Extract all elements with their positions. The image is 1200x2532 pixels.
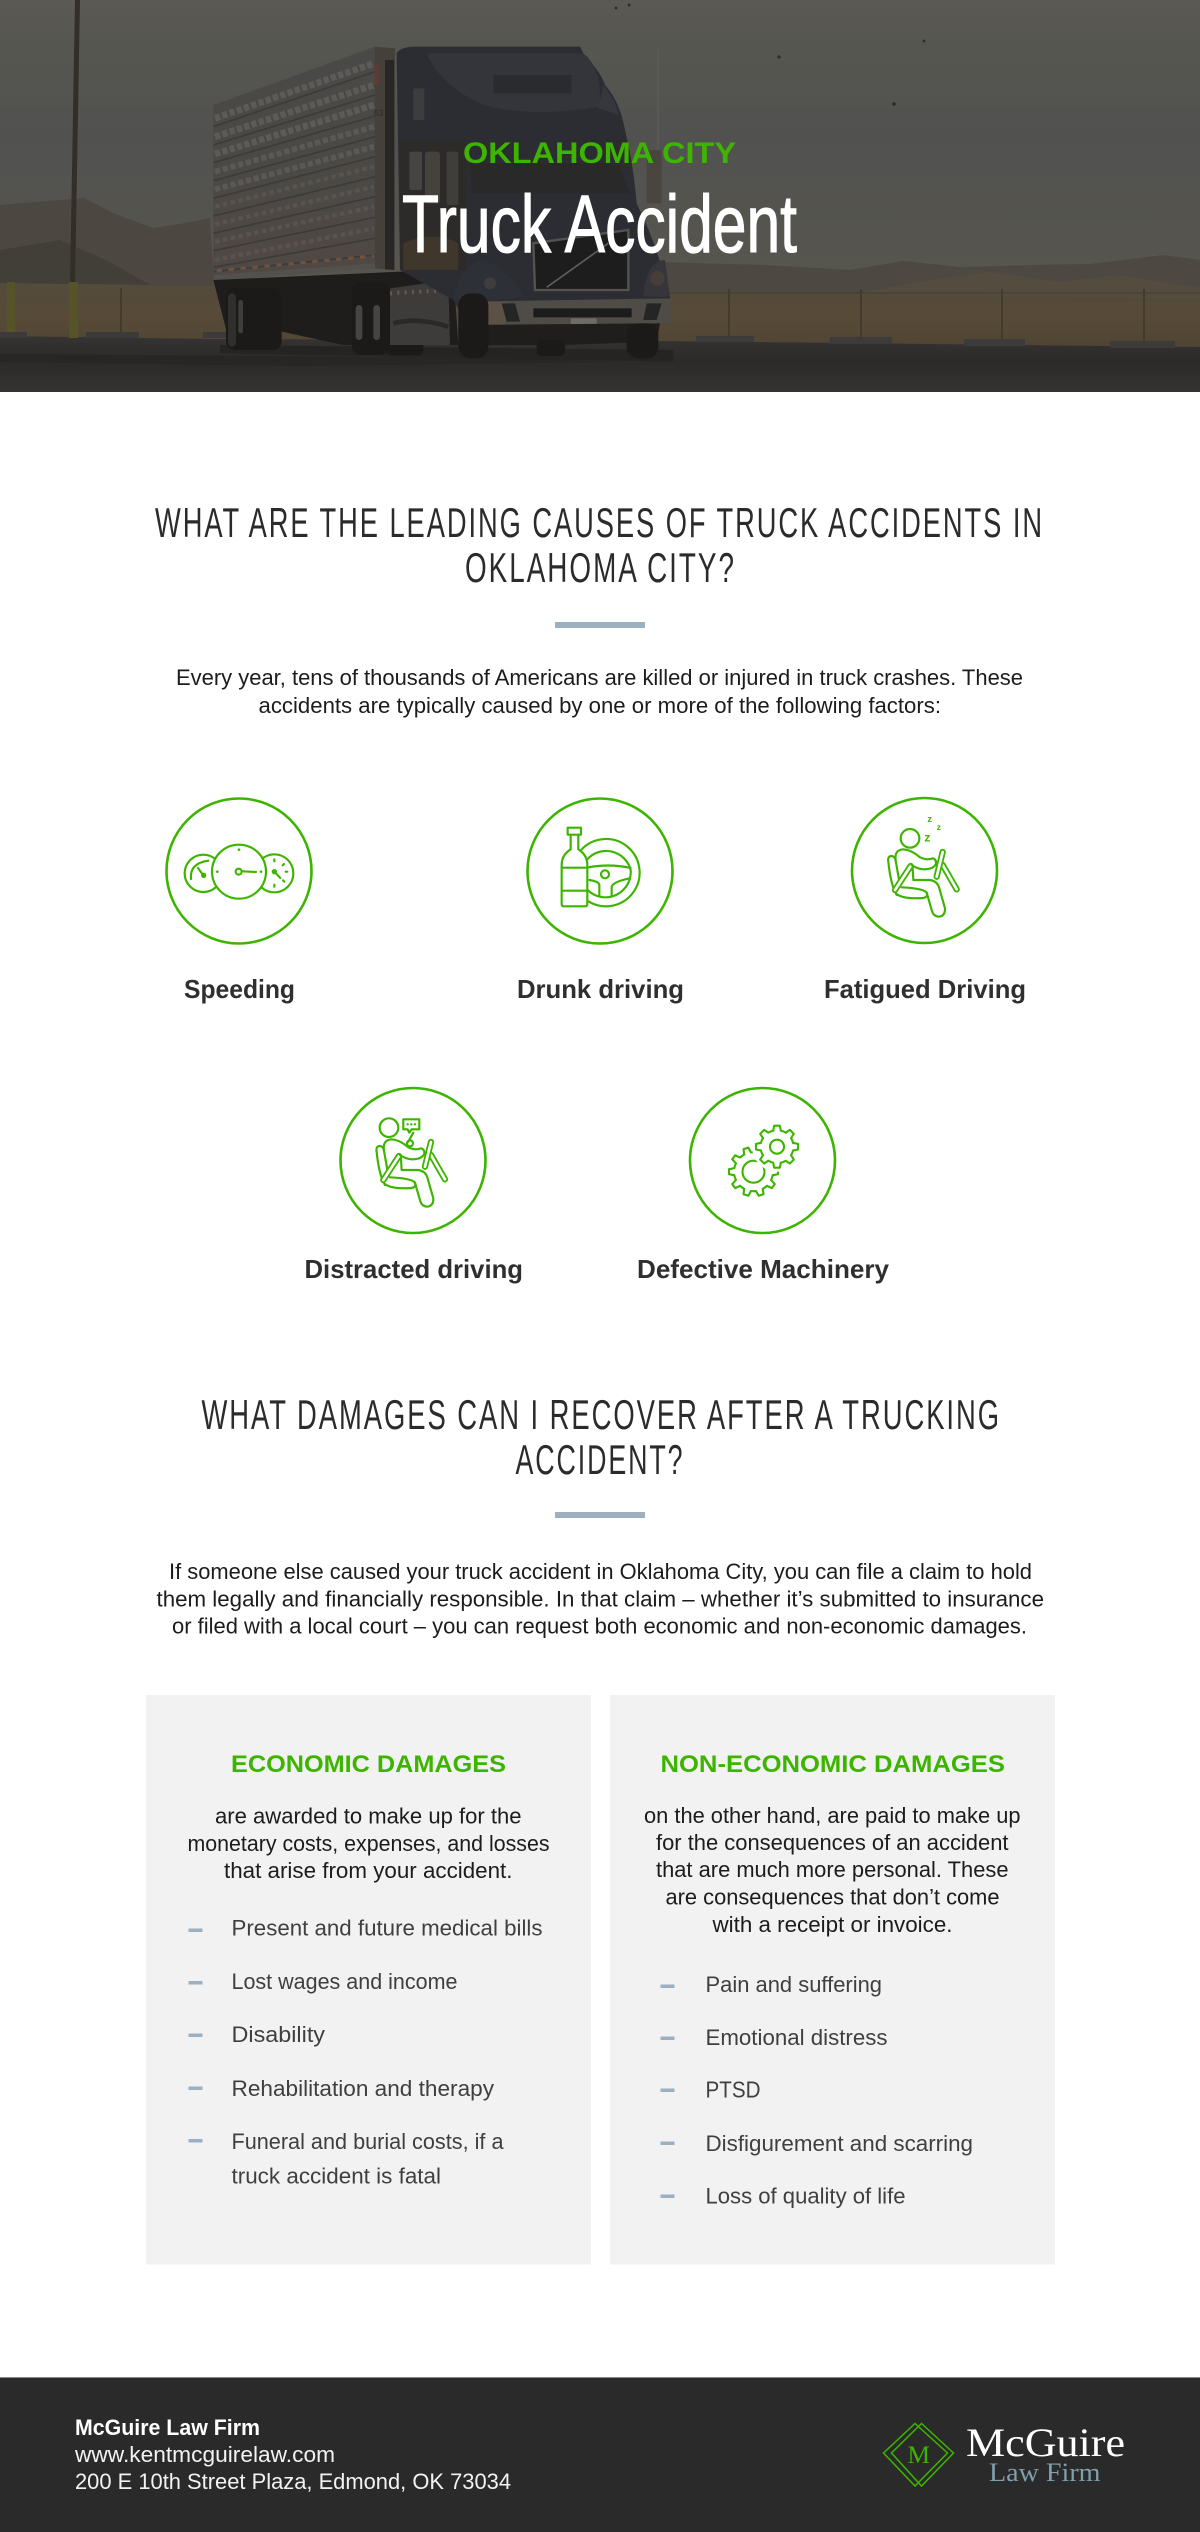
truck: 53 [374,108,384,118]
list: economic damages: Rehabilitation and therapy [232,2076,494,2101]
label: Distracted driving [304,1254,523,1284]
cab [397,47,672,325]
logo: McGuire Law Firm: Law Firm [989,2458,1100,2487]
panel heading: ECONOMIC DAMAGES [231,1751,506,1778]
cause: defective machinery [637,1088,890,1284]
firm contact details: McGuire Law Firm [75,2415,260,2440]
panel description: are consequences that don’t come [666,1884,1000,1910]
panel heading: NON-ECONOMIC DAMAGES [660,1751,1005,1778]
list: economic damages: Present and future medical bills [232,1916,542,1940]
heading: leading causes [155,499,1044,591]
cause: distracted driving [304,1088,523,1284]
hero subtitle: OKLAHOMA CITY [463,137,736,170]
panel description: that arise from your accident. [224,1858,512,1883]
trailer underside and wheels [213,269,458,345]
panel description: that are much more personal. These [656,1857,1008,1882]
heading: leading causes: OKLAHOMA CITY? [465,544,736,591]
panel description: for the consequences of an accident [656,1830,1008,1855]
intro paragraph: damages [156,1559,1044,1638]
list: economic damages [188,1916,542,2188]
icon: bottle and steering wheel [528,798,672,944]
intro paragraph: causes [176,665,1023,718]
list: economic damages: Funeral and burial costs, if a [232,2129,504,2154]
intro paragraph: causes: accidents are typically caused by one or more of the following factors: [258,693,941,718]
logo: McGuire Law Firm [884,2420,1125,2487]
icon: speedometer gauges [166,798,312,944]
heading: damages [202,1391,1001,1483]
icon: sleeping driver: z [927,814,932,824]
label: Fatigued Driving [824,974,1026,1004]
intro paragraph: damages: or filed with a local court – you can request both economic and non-economic damages. [172,1614,1027,1638]
panel description: with a receipt or invoice. [711,1912,952,1937]
intro paragraph: causes: Every year, tens of thousands of Americans are killed or injured in truck crashes. These [176,665,1023,690]
light pole [70,0,80,285]
list: economic damages: Lost wages and income [232,1969,458,1994]
panel: non-economic damages [610,1695,1055,2264]
fence posts [121,288,1200,342]
hero banner [0,0,1200,392]
panel description: are awarded to make up for the [215,1804,522,1828]
intro paragraph: damages: them legally and financially responsible. In that claim – whether it’s submitted to insurance [156,1586,1044,1612]
firm contact details: 200 E 10th Street Plaza, Edmond, OK 73034 [75,2469,511,2494]
list: non-economic damages: Disfigurement and scarring [706,2131,973,2156]
panel description: on the other hand, are paid to make up [644,1803,1020,1828]
list: non-economic damages: PTSD [706,2076,760,2102]
list: non-economic damages: Loss of quality of life [706,2184,906,2208]
icon: driver with phone [340,1088,486,1233]
truck [213,47,673,362]
list: non-economic damages [660,1972,973,2208]
intro paragraph: damages: If someone else caused your truck accident in Oklahoma City, you can file a claim to hold [169,1559,1032,1584]
firm contact details [74,2415,511,2494]
cause: fatigued driving [824,798,1026,1004]
list: non-economic damages: Pain and suffering [706,1972,882,1997]
label: Speeding [184,974,295,1004]
icon: sleeping driver: z [937,822,942,832]
hero photo: truck on desert road [0,0,1200,392]
label: Defective Machinery [637,1254,890,1284]
list: non-economic damages: Emotional distress [706,2025,888,2050]
truck: 3000R [372,63,381,86]
panel description [188,1804,550,1883]
footer [0,2377,1200,2532]
firm contact details: www.kentmcguirelaw.com [74,2442,335,2467]
heading: damages: ACCIDENT? [516,1436,684,1483]
panel description [644,1803,1020,1937]
icon: sleeping driver [852,798,997,943]
cause: drunk driving [517,798,684,1004]
list: economic damages: Disability [232,2022,325,2047]
icon: sleeping driver: z [924,830,930,844]
label: Drunk driving [517,974,684,1004]
icon: gears [690,1088,835,1233]
logo: McGuire Law Firm: McGuire [966,2420,1125,2465]
logo: McGuire Law Firm: M [908,2442,930,2469]
cause: speeding [166,798,312,1004]
panel: economic damages [146,1695,591,2264]
list: economic damages: truck accident is fatal [232,2164,441,2188]
hero title: Truck Accident [402,179,797,270]
panel description: monetary costs, expenses, and losses [188,1831,550,1856]
